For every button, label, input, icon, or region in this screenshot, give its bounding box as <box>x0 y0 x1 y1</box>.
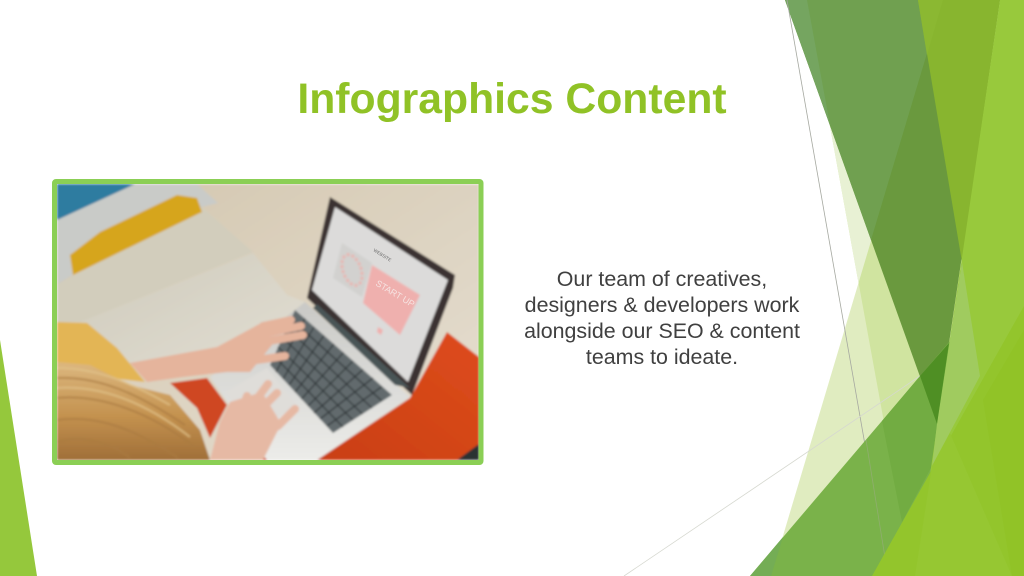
screen heading text: WEBSITE <box>372 248 392 263</box>
sofa seat cushion <box>85 255 302 362</box>
dark corner <box>457 444 479 460</box>
laptop display <box>312 207 448 382</box>
body text: alongside our SEO & content <box>524 319 800 343</box>
pillow yellow patch <box>70 195 202 275</box>
hinge <box>313 304 410 388</box>
screen small pink button <box>377 327 383 335</box>
photo frame <box>54 182 481 462</box>
body text: teams to ideate. <box>586 345 738 369</box>
body text <box>524 267 800 369</box>
orange blanket right <box>317 332 479 460</box>
screen start up text: START UP <box>374 278 416 309</box>
pillow <box>57 184 218 284</box>
laptop base <box>210 302 410 460</box>
floor <box>57 184 479 460</box>
right facet shapes <box>624 0 1024 576</box>
hair strands <box>57 376 184 428</box>
pillow blue patch <box>57 184 135 220</box>
yellow sweater <box>57 322 145 382</box>
photo: woman using a laptop on a sofa <box>57 184 479 460</box>
trackpad <box>225 368 297 430</box>
orange blanket left <box>170 378 227 438</box>
keyboard <box>270 310 392 433</box>
left corner triangle <box>0 340 37 576</box>
screen image panel <box>334 245 371 295</box>
screen pink panel <box>363 265 420 335</box>
laptop screen bezel <box>307 197 455 395</box>
lower hand fingers <box>243 384 295 426</box>
upper hand fingers <box>250 320 303 361</box>
sofa back cushion <box>57 207 253 322</box>
upper arm and palm <box>130 322 272 382</box>
body text: Our team of creatives, <box>557 267 767 291</box>
title: Infographics Content <box>297 75 727 123</box>
screen squiggle <box>340 252 364 288</box>
hair <box>57 362 210 460</box>
body text: designers & developers work <box>525 293 800 317</box>
lower hand palm <box>210 392 282 460</box>
